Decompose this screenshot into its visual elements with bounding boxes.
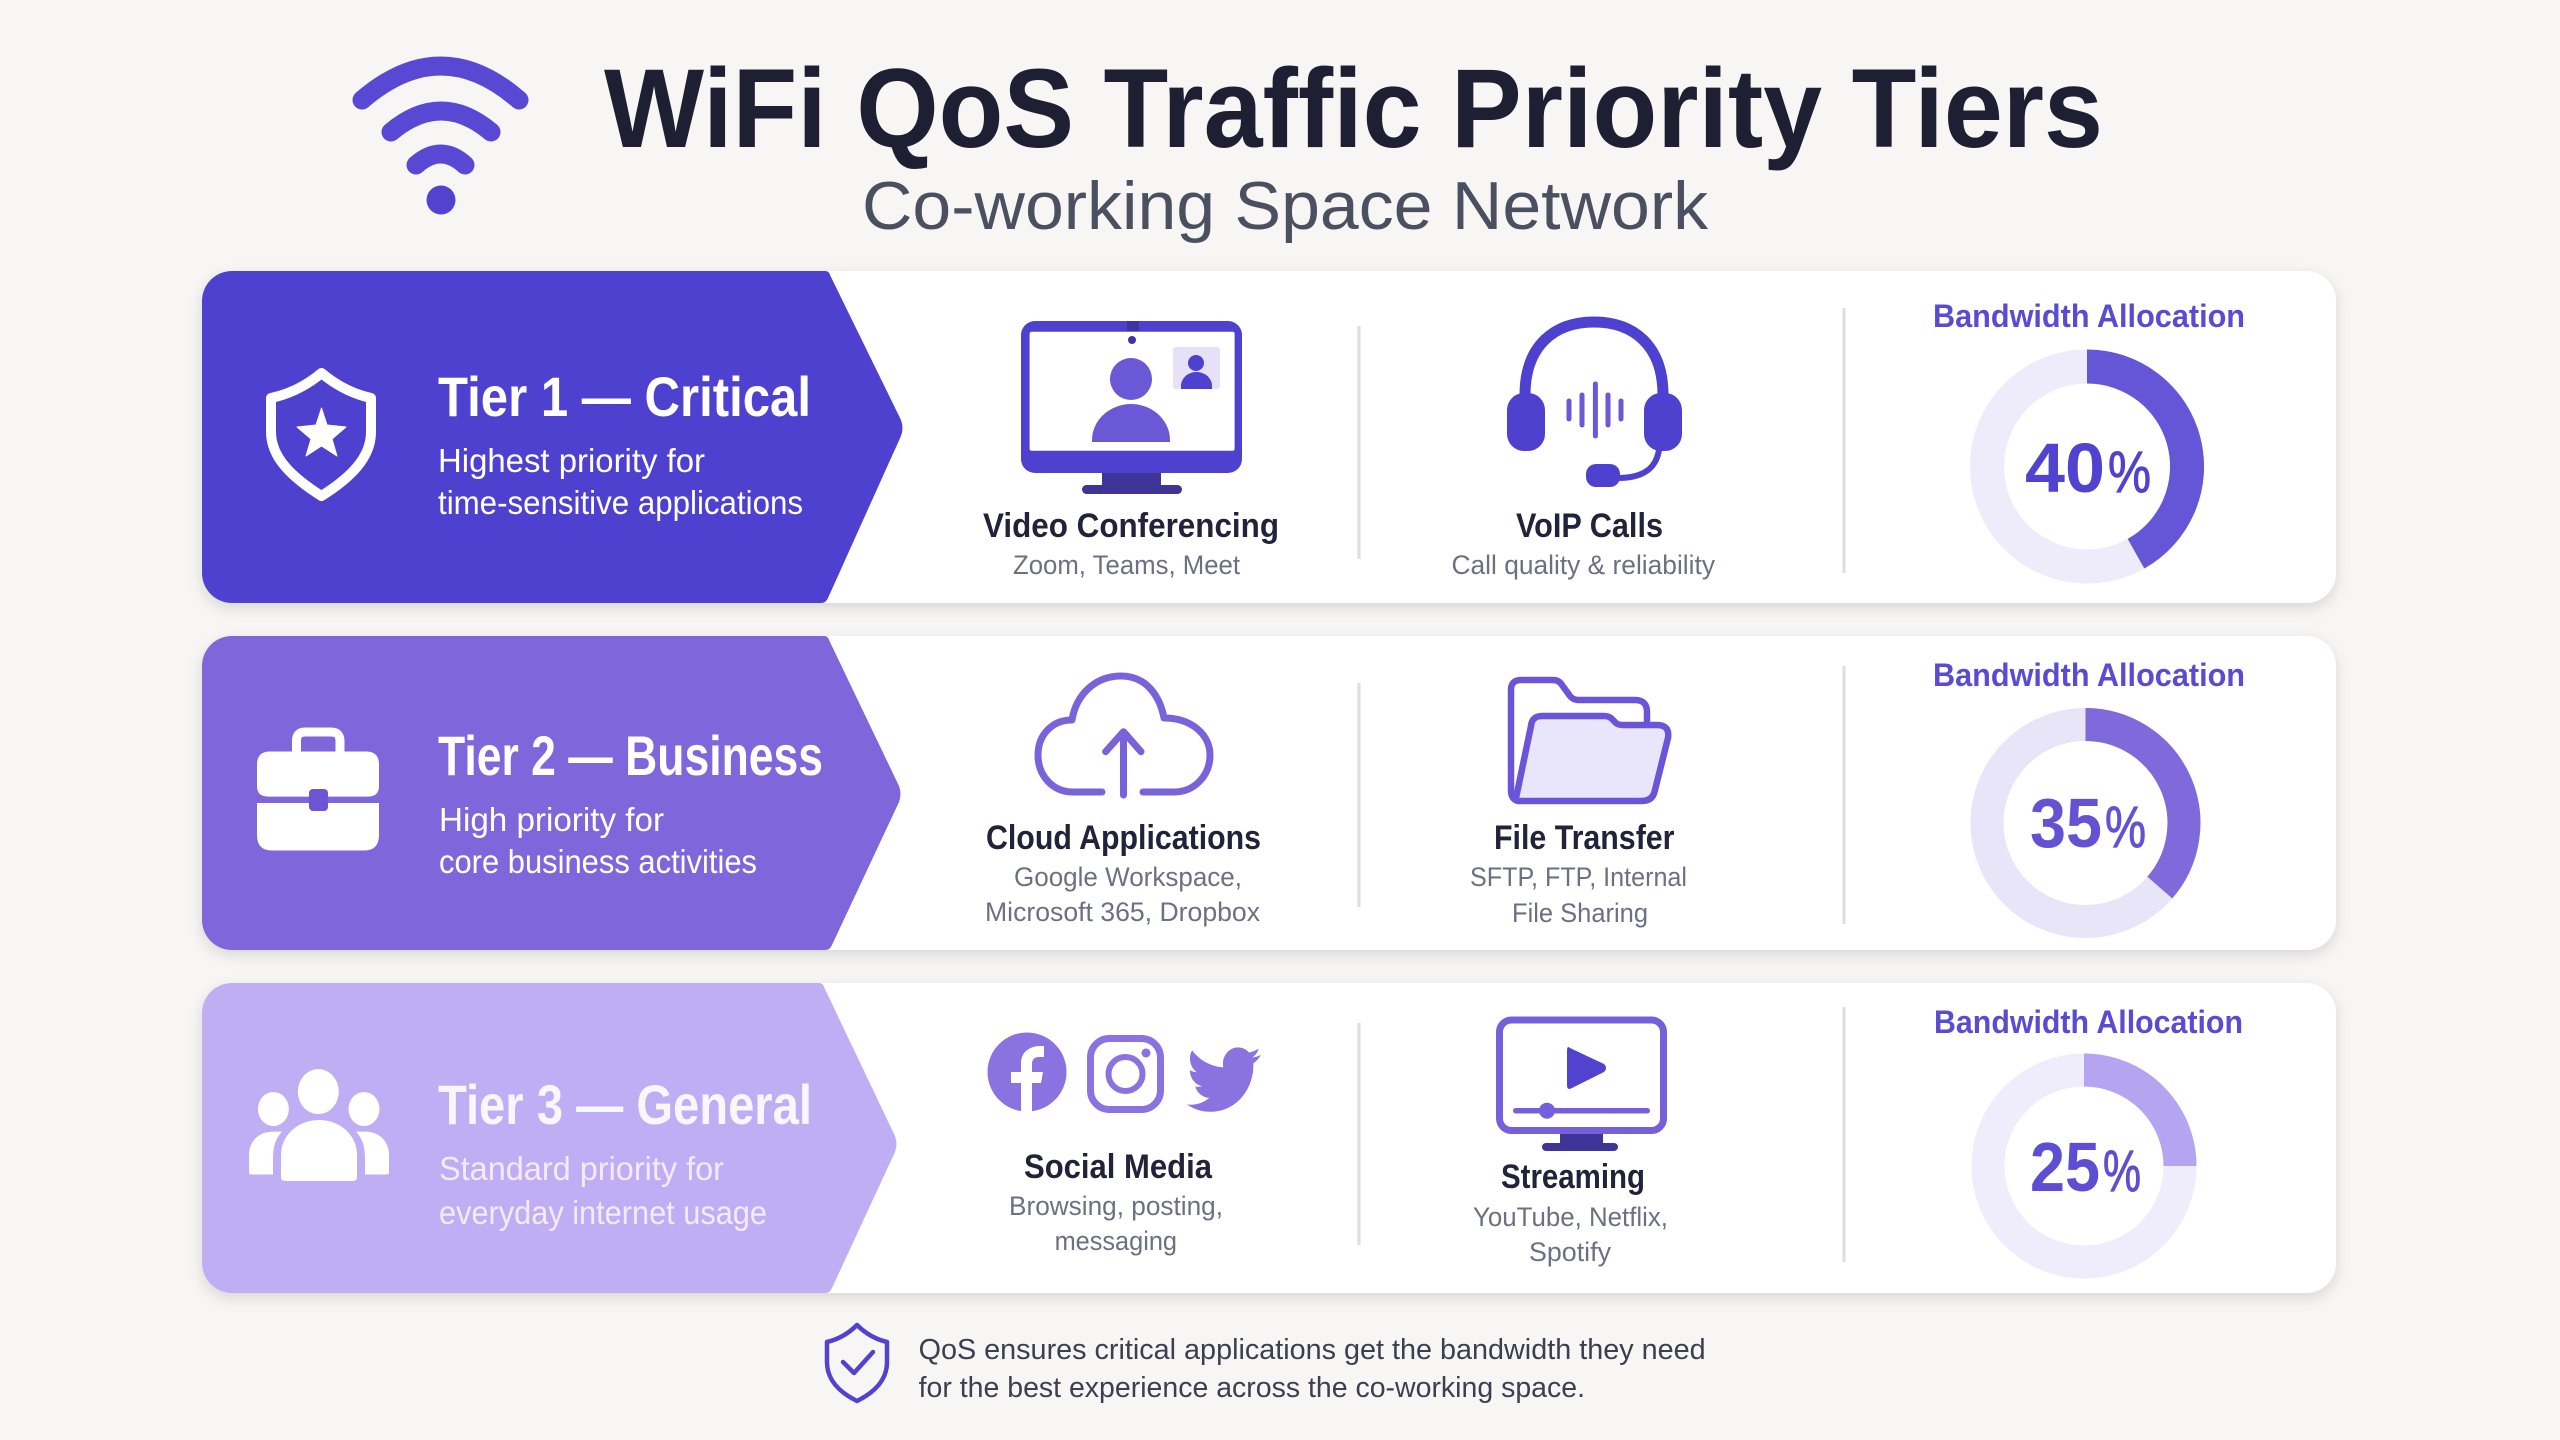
tier 1 description: time-sensitive applications xyxy=(438,484,803,521)
icon: facebook xyxy=(988,1032,1066,1112)
tier 3 description: everyday internet usage xyxy=(439,1194,767,1231)
footer text xyxy=(919,1334,1706,1404)
icon: shield with star xyxy=(271,373,371,496)
donut chart: 25%: % xyxy=(2103,1139,2141,1204)
icon: streaming screen xyxy=(1500,1020,1664,1151)
item: streaming: Spotify xyxy=(1529,1237,1611,1267)
tier 2 description: High priority for xyxy=(439,801,664,838)
item: social media: messaging xyxy=(1055,1226,1177,1256)
icon: people group xyxy=(249,1069,389,1181)
icon: cloud upload xyxy=(1038,676,1210,795)
item: social media: Browsing, posting, xyxy=(1009,1191,1223,1221)
tier 2 banner xyxy=(202,636,900,950)
card background xyxy=(202,271,2336,603)
item: file transfer: File Transfer xyxy=(1494,819,1674,857)
footer text: for the best experience across the co-working space. xyxy=(919,1372,1585,1404)
donut chart: 35% xyxy=(1987,724,2184,922)
icon: folder xyxy=(1511,680,1668,801)
donut chart: 25%: 25 xyxy=(2030,1128,2100,1206)
icon: bird xyxy=(1187,1047,1261,1112)
icon: headset xyxy=(1507,322,1682,487)
bandwidth label: Bandwidth Allocation xyxy=(1934,1004,2243,1040)
item: file transfer xyxy=(1470,819,1687,928)
icon: shield check xyxy=(827,1325,887,1401)
item: streaming xyxy=(1473,1158,1668,1267)
tier 1 description: Highest priority for xyxy=(438,442,705,479)
tier 3 description xyxy=(439,1150,767,1231)
item: voip calls: Call quality & reliability xyxy=(1452,550,1715,580)
bandwidth label: Bandwidth Allocation xyxy=(1933,657,2245,693)
tier 1 description xyxy=(438,442,803,521)
icon: video conferencing monitor xyxy=(1021,321,1242,494)
item: cloud applications: Google Workspace, xyxy=(1014,862,1242,892)
footer text: QoS ensures critical applications get the bandwidth they need xyxy=(919,1334,1706,1366)
item: file transfer: File Sharing xyxy=(1512,898,1648,928)
donut chart: 40%: % xyxy=(2108,440,2151,505)
footer note xyxy=(827,1325,1706,1404)
item: video conferencing: Video Conferencing xyxy=(983,507,1279,545)
donut chart: 40% xyxy=(1987,366,2187,566)
tier 2 description xyxy=(439,801,757,880)
icon: social media logos xyxy=(988,1032,1261,1112)
tier 3 heading: Tier 3 — General xyxy=(438,1073,812,1136)
header xyxy=(362,46,2103,244)
subtitle: Co-working Space Network xyxy=(862,168,1709,244)
tier 3 description: Standard priority for xyxy=(439,1150,724,1187)
item: social media xyxy=(1009,1148,1223,1256)
item: cloud applications: Microsoft 365, Dropbox xyxy=(985,897,1260,927)
item: streaming: YouTube, Netflix, xyxy=(1473,1202,1668,1232)
icon: wifi xyxy=(362,66,519,214)
icon: briefcase xyxy=(257,732,379,850)
panel: tier 3 general xyxy=(202,983,2336,1293)
title: WiFi QoS Traffic Priority Tiers xyxy=(604,46,2103,171)
card background xyxy=(202,983,2336,1293)
item: video conferencing xyxy=(983,507,1279,580)
item: cloud applications: Cloud Applications xyxy=(986,819,1261,857)
donut chart: 35%: 35 xyxy=(2030,784,2102,862)
item: voip calls xyxy=(1452,507,1715,580)
panel: tier 1 critical xyxy=(202,271,2336,603)
item: video conferencing: Zoom, Teams, Meet xyxy=(1013,550,1240,580)
panel: tier 2 business xyxy=(202,636,2336,950)
item: social media: Social Media xyxy=(1024,1148,1213,1186)
tier 1 banner xyxy=(202,271,902,603)
tier 2 heading: Tier 2 — Business xyxy=(438,724,823,787)
item: cloud applications xyxy=(985,819,1261,927)
bandwidth label: Bandwidth Allocation xyxy=(1933,298,2245,334)
card background xyxy=(202,636,2336,950)
icon: instagram xyxy=(1090,1038,1160,1110)
donut chart: 35%: % xyxy=(2105,795,2146,860)
tier 2 description: core business activities xyxy=(439,843,757,880)
donut chart: 25% xyxy=(1988,1070,2180,1262)
item: streaming: Streaming xyxy=(1501,1158,1645,1196)
item: file transfer: SFTP, FTP, Internal xyxy=(1470,862,1687,892)
tier 1 heading: Tier 1 — Critical xyxy=(438,365,811,428)
item: voip calls: VoIP Calls xyxy=(1516,507,1663,545)
donut chart: 40%: 40 xyxy=(2025,429,2105,507)
tier 3 banner xyxy=(202,983,896,1293)
